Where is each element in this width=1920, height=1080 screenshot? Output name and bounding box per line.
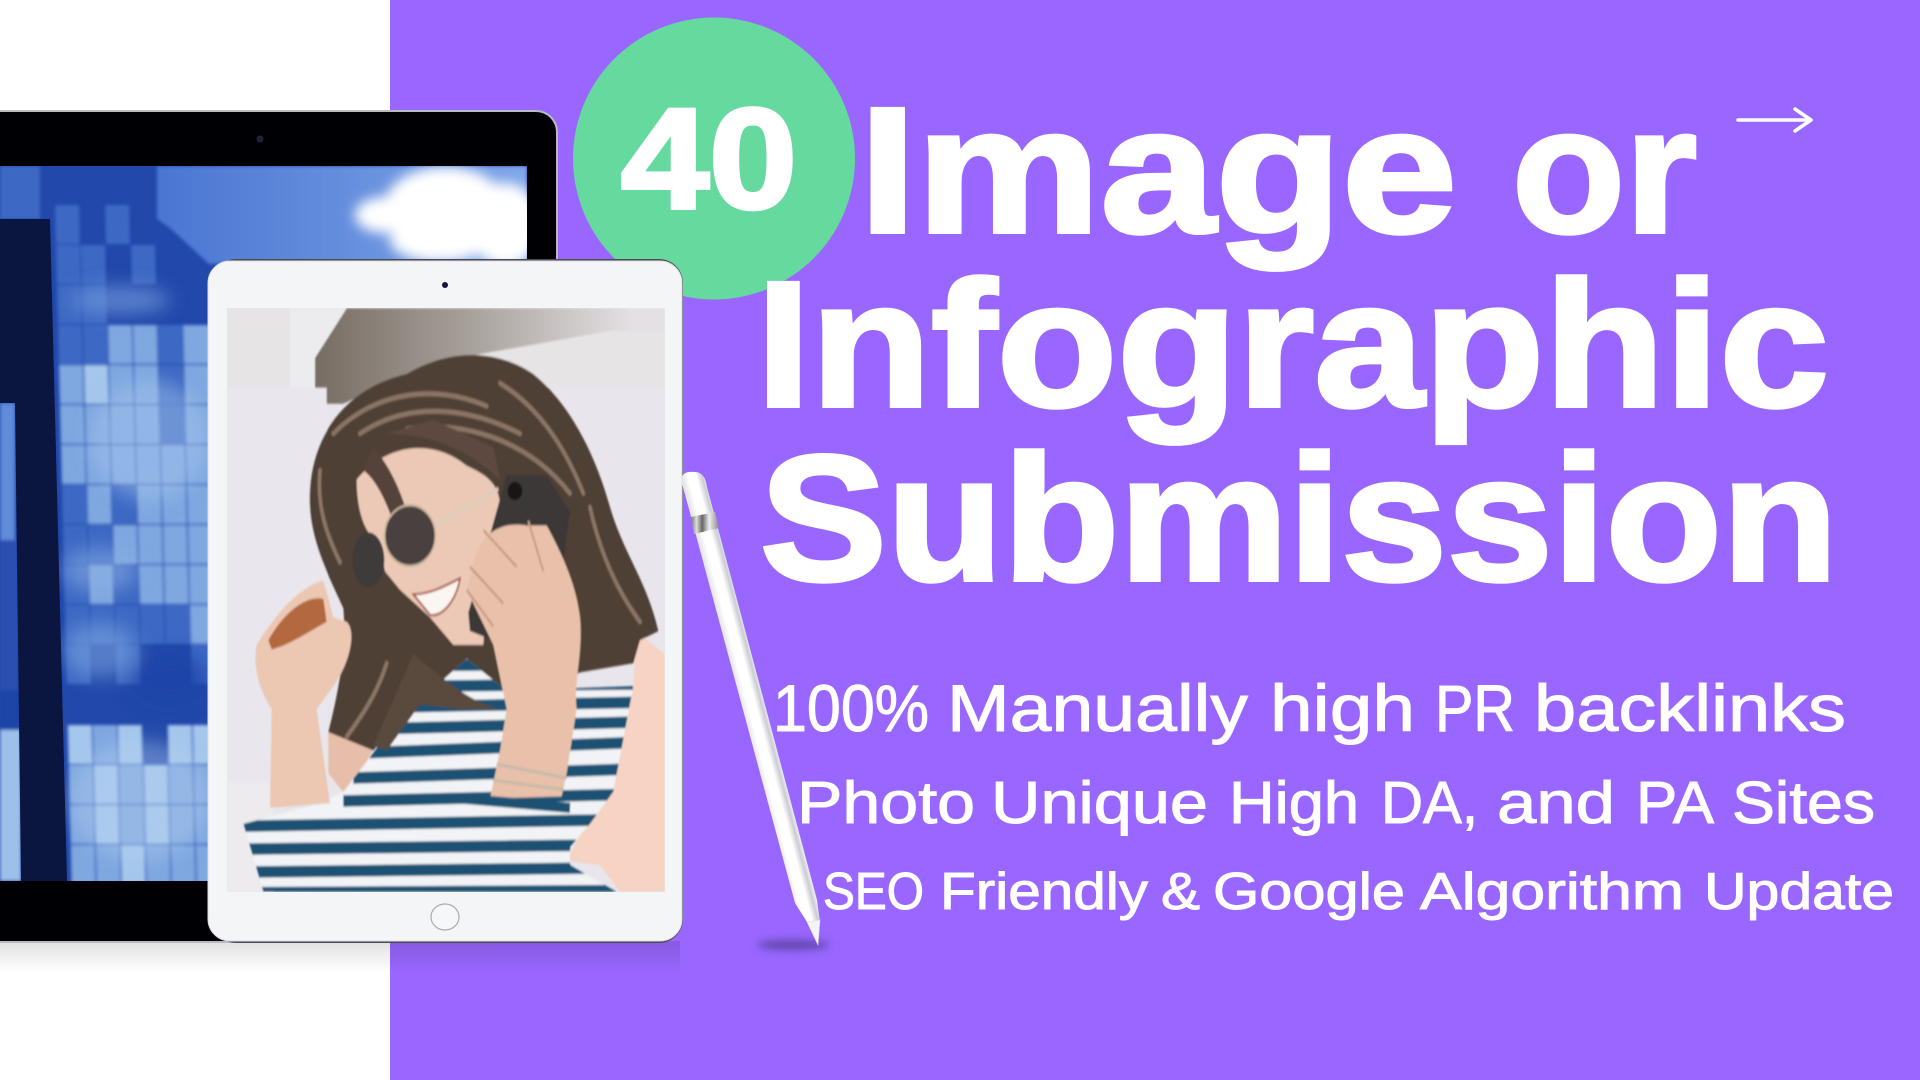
white tablet [208,259,683,943]
reflected cloud wisps on glass [62,286,210,860]
purple panel [390,0,1920,1080]
feature list: DA, [1381,770,1478,836]
feature list: Unique [991,770,1208,836]
feature list: Algorithm [1420,863,1684,921]
main title: Infographic [756,244,1829,444]
feature list: high [1270,671,1415,745]
woman photo on white tablet screen [227,308,665,897]
hair falling over shirt [373,654,500,750]
striped shirt [240,654,647,897]
feature list: PR [1435,671,1515,745]
hair highlight strands [319,383,640,737]
arrow [1738,109,1811,131]
feature list: 100% [773,671,929,745]
main title: Image [859,70,1457,270]
forearms and hands [467,525,581,799]
feature list [773,671,1894,921]
building photo on black tablet screen [0,166,541,884]
feature list: Google [1213,863,1405,921]
feature list: backlinks [1534,671,1846,745]
phone [468,475,570,640]
hair across face [364,456,405,516]
stylus pencil [682,472,820,945]
pink jacket [567,631,665,892]
smile [413,578,460,615]
feature list: High [1229,770,1359,836]
feature list: PA [1636,770,1715,836]
main title: or [1512,70,1697,270]
home button [431,904,459,930]
hair [310,355,658,750]
face [357,448,500,645]
badge number 40: 40 [621,80,797,239]
feature list: Sites [1732,770,1875,836]
pencil nib [807,920,820,945]
feature list: Friendly [940,863,1148,921]
green circle badge [573,18,855,300]
feature list: Update [1704,863,1894,921]
tablet ground shadow [0,941,680,973]
main title [756,70,1838,618]
feature list: Manually [947,671,1248,745]
pencil metal band [691,512,719,534]
feature list: and [1497,770,1615,836]
camera dot on black tablet [256,136,264,142]
sunglasses [385,505,435,566]
feature list: Photo [797,770,975,836]
main title: Submission [760,418,1838,618]
feature list: & [1161,863,1200,921]
feature list: SEO [823,863,924,921]
black tablet [0,110,558,943]
dark building column [0,219,67,881]
pencil shadow [757,940,829,950]
camera dot on white tablet [442,282,448,288]
